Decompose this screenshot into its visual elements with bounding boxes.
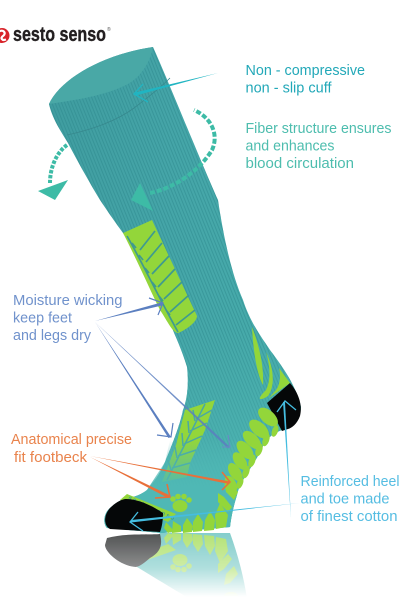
line 1: Anatomical precise	[11, 431, 132, 448]
line 3: and legs dry	[13, 327, 91, 344]
toe green band	[120, 494, 176, 522]
calf green panel	[123, 220, 197, 333]
sock body	[49, 47, 301, 533]
paw emblem	[170, 494, 192, 512]
logo wordmark: sesto senso	[13, 24, 106, 46]
cuff opening	[49, 47, 153, 104]
dashed arc	[150, 110, 215, 193]
reflected sock	[137, 533, 247, 599]
line 3: of finest cotton	[300, 508, 398, 525]
heel green chevrons	[222, 404, 281, 494]
line 2: and toe made	[300, 490, 390, 508]
back of leg green stripes	[252, 327, 290, 399]
sole green wedges	[164, 481, 238, 533]
foot base	[104, 429, 288, 533]
arrow: cuff	[134, 73, 218, 102]
label: fiber structure	[246, 120, 392, 172]
logo mark	[0, 28, 10, 43]
toe band text: sesto senso	[127, 495, 175, 522]
line 1: Moisture wicking	[13, 292, 122, 309]
heel black reinforcement	[267, 383, 301, 431]
label: reinforced heel and toe	[300, 473, 400, 525]
label: anatomical fit	[11, 431, 132, 466]
registered mark: ®	[107, 26, 111, 33]
line 1: Fiber structure ensures	[246, 120, 392, 137]
label: non-slip cuff	[246, 62, 365, 96]
line 2: non - slip cuff	[246, 80, 332, 96]
line 2: keep feet	[13, 310, 73, 326]
reflected toe band	[148, 544, 176, 560]
rotation arrow left	[38, 145, 68, 200]
knit ribbing	[49, 48, 301, 533]
label: moisture wicking	[13, 292, 122, 344]
reflected paw	[170, 554, 192, 572]
reflection of foot	[105, 533, 247, 600]
reflected toe	[105, 534, 161, 567]
dashed arc	[50, 145, 67, 183]
line 2: and enhances	[246, 138, 334, 154]
arrow head	[38, 180, 68, 200]
rotation arrow right	[131, 110, 215, 211]
arrows: reinforced heel and toe	[130, 401, 300, 531]
logo: sesto senso	[0, 24, 111, 46]
ankle green panel	[162, 400, 215, 482]
reflected sole wedges	[164, 533, 238, 585]
arrows: anatomical fit	[90, 456, 230, 498]
arrow head	[131, 183, 153, 211]
toe black reinforcement	[105, 499, 163, 532]
sock illustration	[49, 47, 301, 533]
arrows: moisture wicking	[95, 298, 230, 448]
line 2: fit footbeck	[14, 449, 87, 466]
line 3: blood circulation	[246, 155, 354, 172]
line 1: Non - compressive	[246, 62, 365, 79]
foot	[104, 404, 288, 533]
cuff band line	[67, 78, 170, 135]
